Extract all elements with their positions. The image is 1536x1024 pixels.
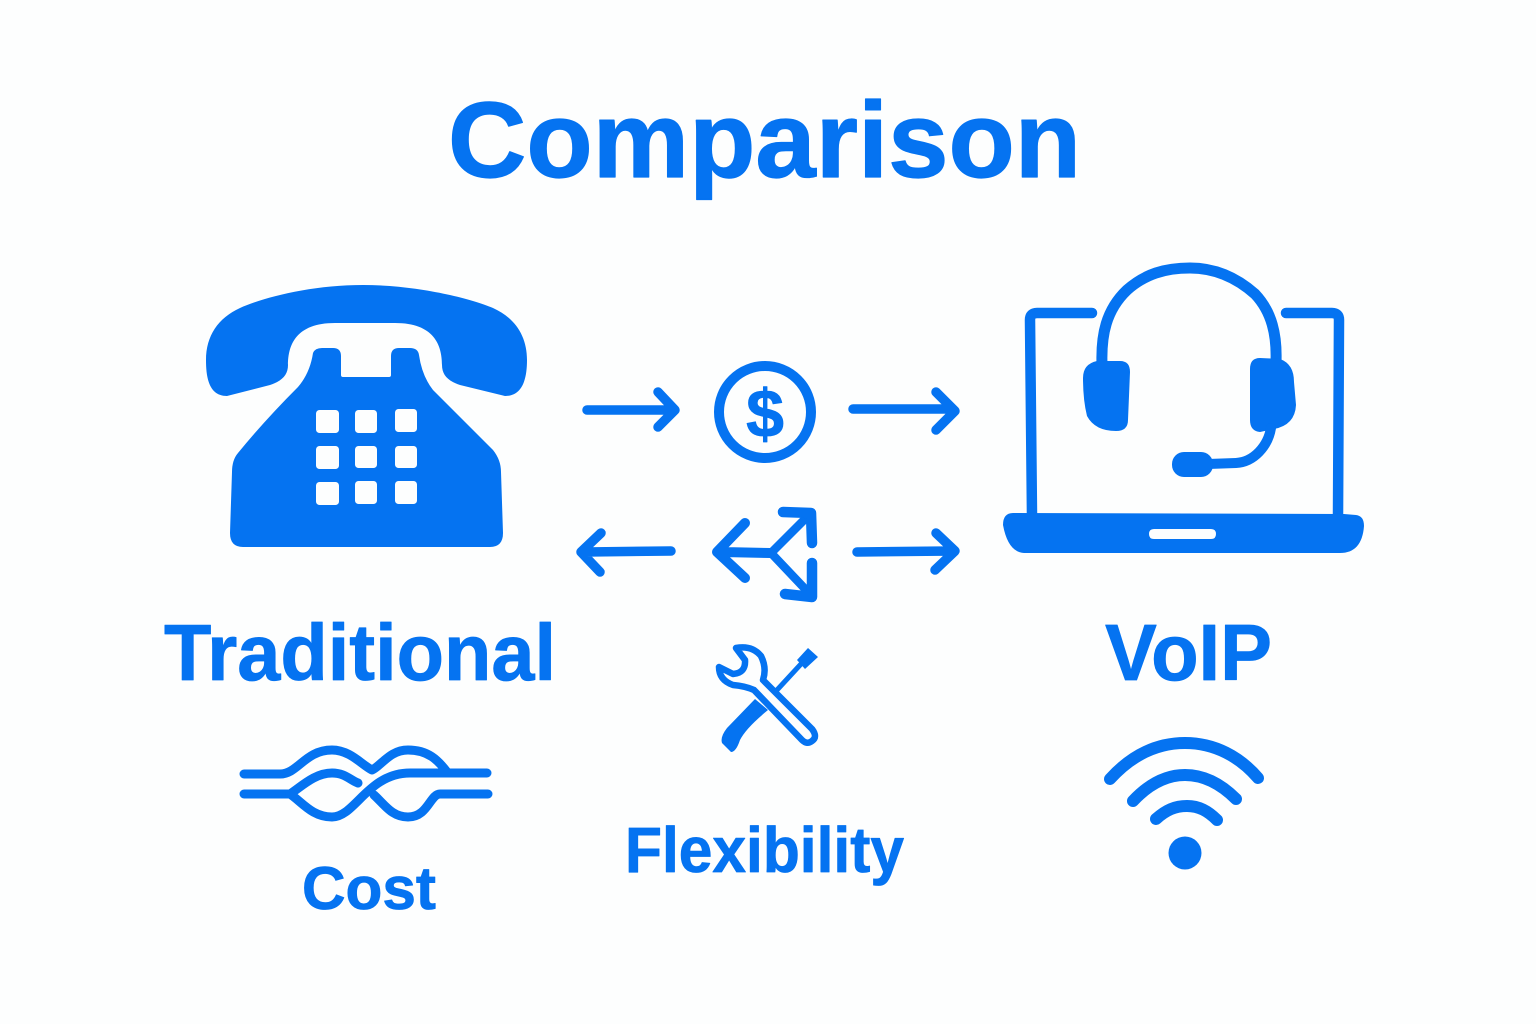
heading: VoIP: VoIP <box>1105 608 1272 697</box>
icon: branching arrows <box>717 512 812 597</box>
icon: VoIP laptop with headset <box>1003 268 1364 553</box>
title: Comparison <box>448 79 1081 200</box>
icon: wrench and screwdriver <box>719 647 818 752</box>
heading: Traditional: Traditional <box>164 608 556 697</box>
arrow: cost right to VoIP <box>853 392 955 430</box>
arrow: cost right from traditional <box>587 392 675 427</box>
icon: wifi signal <box>1110 743 1258 870</box>
keypad <box>316 409 417 505</box>
icon: dollar coin <box>719 366 811 458</box>
icon: dollar coin: $ <box>746 376 784 452</box>
icon: traditional telephone <box>206 285 527 547</box>
arrow: flexibility right to VoIP <box>857 533 955 570</box>
label: Flexibility: Flexibility <box>625 814 904 886</box>
arrow: flexibility left to traditional <box>581 533 671 572</box>
icon: tangled copper wires <box>244 750 488 817</box>
label: Cost: Cost <box>302 855 436 922</box>
